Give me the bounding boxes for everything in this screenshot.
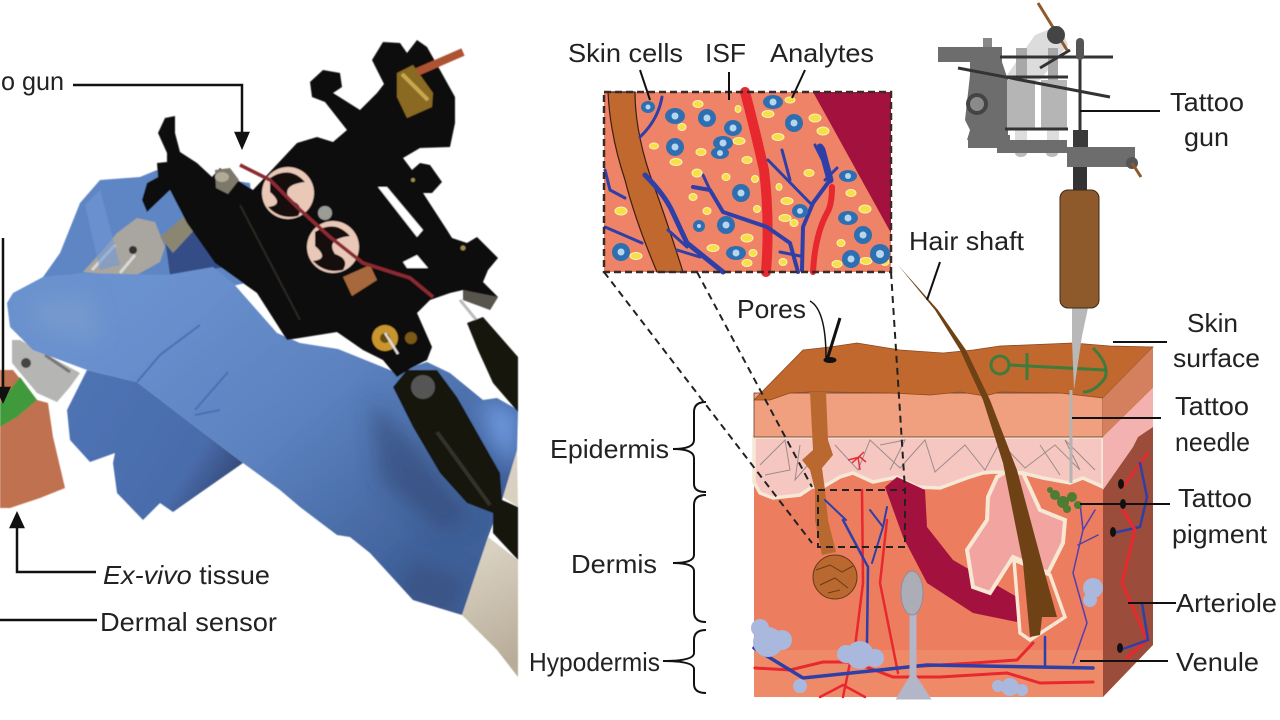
label: ISF: ISF bbox=[705, 38, 746, 68]
label: venule: Venule bbox=[1176, 647, 1259, 677]
adjustment wheel bbox=[968, 95, 986, 113]
label: pigment: pigment bbox=[1172, 519, 1268, 549]
front screw top bbox=[983, 38, 992, 47]
black grip bbox=[393, 370, 518, 560]
pink sebaceous gland bbox=[967, 472, 1065, 593]
label: pores: Pores bbox=[737, 294, 806, 324]
panel: magnified dermis inset bbox=[604, 92, 891, 272]
glove shading bbox=[30, 295, 520, 620]
dashed zoom guide lines bbox=[604, 272, 905, 547]
side face: dermis bbox=[1103, 427, 1153, 697]
label: dermis: Dermis bbox=[571, 549, 657, 579]
side-face vessels bbox=[1110, 453, 1148, 658]
dermal sensor leader bbox=[0, 619, 97, 621]
skin cells bbox=[612, 95, 890, 268]
arterioles in block bbox=[755, 490, 1093, 697]
red rubber band bbox=[240, 165, 433, 297]
label: tattoo: Tattoo bbox=[1175, 391, 1249, 421]
white sleeve cuff bbox=[462, 450, 518, 677]
spring bars bbox=[958, 45, 1113, 130]
label: hair shaft: Hair shaft bbox=[909, 226, 1025, 256]
rear screw bbox=[1126, 157, 1141, 177]
anchor tattoo bbox=[991, 348, 1106, 392]
needle bar knob bbox=[1076, 38, 1084, 60]
inset background bbox=[604, 92, 891, 272]
label: hypodermis: Hypodermis bbox=[529, 647, 660, 677]
sweat gland duct bbox=[802, 392, 836, 555]
top plate bbox=[938, 47, 1002, 62]
tattoo needle bbox=[1071, 308, 1088, 483]
green dermal sensor bbox=[0, 377, 37, 427]
label: tattoo: Tattoo bbox=[1178, 483, 1252, 513]
brass binding post and copper screw bbox=[377, 49, 463, 118]
pacinian corpuscle nerve bbox=[900, 571, 927, 697]
crimson erector muscle bbox=[885, 477, 1017, 622]
arrow: down to sensor bbox=[0, 238, 9, 401]
inset dashed frame bbox=[604, 92, 891, 272]
ex-vivo tissue sample bbox=[0, 370, 65, 508]
side face: pink layer bbox=[1103, 388, 1153, 490]
label: epidermis: Epidermis bbox=[550, 434, 669, 464]
panel: skin cross-section block bbox=[751, 265, 1153, 697]
top pivot circle bbox=[1047, 26, 1065, 44]
front arm bbox=[1067, 147, 1135, 167]
label: ex-vivo tissue: Ex-vivo tissue bbox=[103, 560, 270, 590]
gun frame bbox=[965, 62, 1010, 140]
upper glove finger bbox=[43, 170, 260, 290]
label: surface: surface bbox=[1173, 343, 1260, 373]
layer braces bbox=[663, 402, 706, 693]
label: needle: needle bbox=[1175, 427, 1250, 457]
cell zig-zag pattern bbox=[760, 440, 1095, 480]
copper coil windings bbox=[343, 265, 377, 296]
upper metal tube bbox=[83, 217, 197, 277]
tattoo pigment bbox=[1047, 487, 1082, 513]
machine frame gaps bbox=[378, 187, 428, 268]
venule vessels bbox=[605, 97, 837, 272]
tattoo machine body bbox=[142, 40, 498, 377]
label: arteriole: Arteriole bbox=[1176, 588, 1277, 618]
glove fingers in shadow bbox=[67, 370, 243, 520]
label: analytes: Analytes bbox=[770, 38, 874, 68]
contact screw rod bbox=[1038, 3, 1067, 50]
glove finger shading on upper edge bbox=[85, 190, 120, 270]
label: skin: Skin bbox=[1187, 308, 1238, 338]
arrow: to tattoo gun bbox=[73, 85, 248, 147]
finger shadow under gun bbox=[165, 215, 240, 275]
brown grip bbox=[1060, 190, 1099, 308]
black cable bbox=[467, 317, 518, 412]
sweat gland coil bbox=[813, 555, 857, 599]
skin surface bbox=[754, 343, 1153, 400]
black block bbox=[1073, 130, 1088, 147]
label: dermal sensor: Dermal sensor bbox=[100, 607, 277, 637]
panel: tattoo gun diagram bbox=[938, 3, 1141, 308]
lower plate bbox=[968, 140, 1067, 153]
inset leader lines bbox=[640, 70, 805, 100]
arteriole vessels bbox=[745, 92, 832, 272]
arrow: ex-vivo tissue bbox=[11, 514, 96, 572]
follicle lower sheath bbox=[1014, 560, 1065, 640]
diagram leader lines bbox=[927, 111, 1176, 661]
blue nitrile glove bbox=[7, 267, 518, 615]
brown hair follicle band bbox=[608, 92, 683, 272]
venules in block bbox=[754, 500, 1098, 678]
frame highlights and steel tube bbox=[215, 168, 498, 322]
hypodermis band bbox=[754, 650, 1103, 697]
pore hairs bbox=[810, 301, 840, 362]
silver ball bbox=[318, 206, 332, 220]
capillary red tangle bbox=[848, 452, 866, 470]
label: skin cells: Skin cells bbox=[568, 38, 683, 68]
analyte yellow ovals bbox=[615, 97, 889, 268]
coils bbox=[1007, 48, 1067, 157]
crimson muscle bbox=[813, 92, 891, 233]
label: gun: gun bbox=[1184, 122, 1229, 152]
panel: photograph of gloved hand holding tattoo gun bbox=[0, 40, 520, 677]
neck bbox=[1073, 167, 1087, 190]
hair shaft and follicle bbox=[898, 265, 1057, 637]
upper epidermis layer bbox=[754, 393, 1103, 437]
lower metal tube bbox=[12, 340, 80, 402]
label: tattoo gun diagram: Tattoo bbox=[1170, 87, 1244, 117]
gun light-gray backing bbox=[1000, 25, 1068, 120]
middle epidermis layer bbox=[754, 437, 1103, 498]
dermis front face bbox=[754, 470, 1103, 697]
fat clusters bbox=[751, 578, 1103, 696]
coil logos bbox=[262, 167, 359, 273]
side face: upper layer bbox=[1103, 347, 1153, 437]
brass ring bbox=[372, 325, 417, 354]
